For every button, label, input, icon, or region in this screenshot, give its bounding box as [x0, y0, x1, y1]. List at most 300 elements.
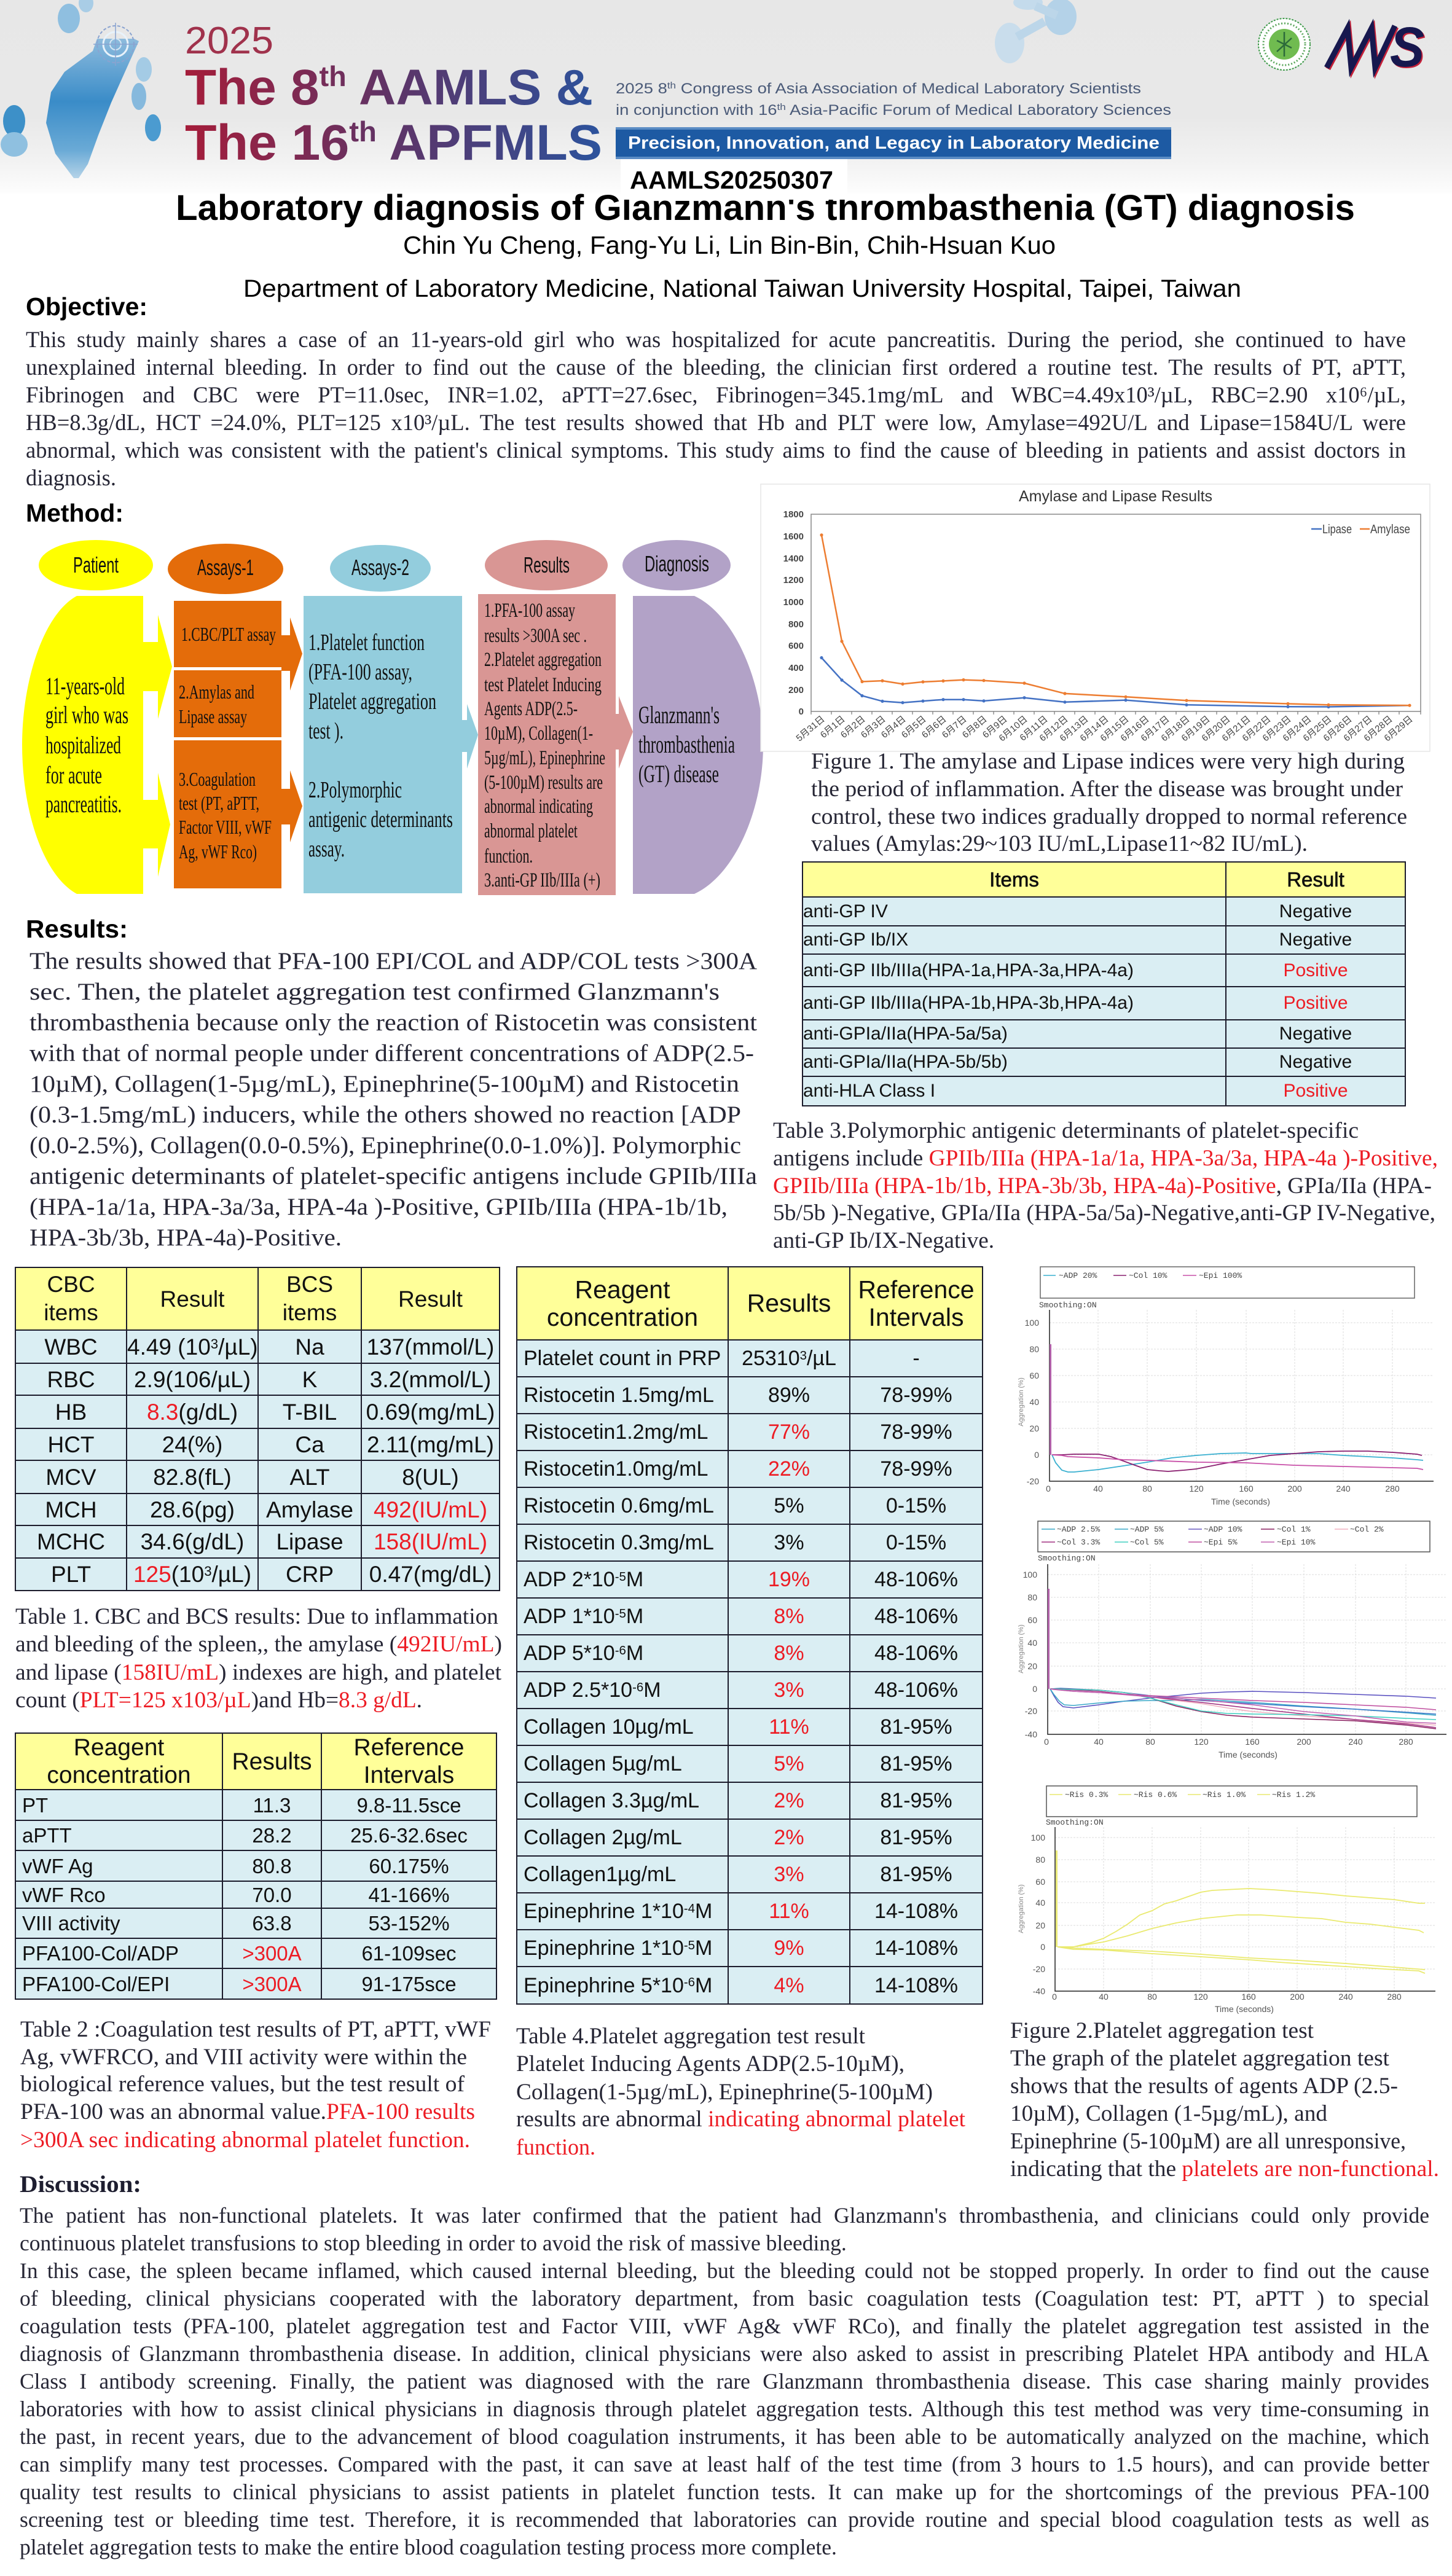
aggregation chart A: ADP 20%, Col 10%, Epi 100%: 60	[1029, 1371, 1039, 1380]
flow column: Patient	[22, 540, 172, 894]
objective paragraph: abnormal, which was consistent with the patient's clinical symptoms. This study aims to find the cause of bleeding in patients and assist doctors in	[26, 437, 1406, 463]
table 2 header row: VIII activity	[22, 1912, 120, 1935]
table 4 caption: Table 4.Platelet aggregation test result	[516, 2024, 866, 2049]
table 4 caption: function.	[516, 2135, 595, 2160]
table 4 header row: 78-99%	[880, 1457, 952, 1481]
table 4 header row	[517, 1267, 982, 2003]
aggregation chart C: Ristocetin series: 0	[1040, 1942, 1045, 1952]
table 1 caption: count (PLT=125 x103/µL)and Hb=8.3 g/dL.	[15, 1688, 422, 1713]
chart x-axis date labels: 6月14日	[1078, 714, 1111, 743]
flow column: Assays-1: Ag, vWF Rco)	[179, 840, 257, 863]
table 4 header row: Collagen 5µg/mL	[524, 1752, 682, 1775]
aggregation chart C: Ristocetin series: Smoothing:ON	[1046, 1818, 1104, 1827]
chart x-axis date labels: 6月23日	[1260, 714, 1293, 743]
table 4 header row: 3%	[774, 1863, 804, 1886]
chart y-axis labels: 1400	[783, 554, 804, 564]
icon: association logo: S	[1390, 16, 1424, 79]
table 4 header row: 14-108%	[874, 1936, 958, 1960]
table 4 header row: 48-106%	[874, 1678, 958, 1702]
chart legend	[1311, 523, 1410, 536]
chart x-axis date labels: 6月10日	[997, 714, 1030, 743]
discussion paragraph: continuous platelet transfusions to stop bleeding in order to avoid the risk of massive bleeding.	[20, 2231, 847, 2255]
aggregation chart B: ADP, Col and Epi dose series: 80	[1027, 1592, 1037, 1602]
table 4 header row: 14-108%	[874, 1900, 958, 1923]
chart x-axis date labels: 6月9日	[981, 714, 1010, 740]
table 1 header row: 2.11(mg/mL)	[367, 1431, 494, 1457]
legend B: ~Epi 5%	[1204, 1538, 1238, 1547]
table 1 header row: 4.49 (103/µL)	[127, 1334, 258, 1359]
chart x-axis date labels: 6月17日	[1139, 714, 1172, 743]
table 3 header row	[803, 863, 1405, 1105]
abstract number	[621, 159, 847, 200]
aggregation chart A: ADP 20%, Col 10%, Epi 100%: 240	[1336, 1484, 1351, 1494]
discussion paragraph: Class I antibody screening. Finally, the patient was diagnosed with the rare Glanzmann thrombasthenia disease. This case sharing mainly provides	[20, 2369, 1429, 2394]
aggregation chart B: ADP, Col and Epi dose series: -20	[1025, 1706, 1037, 1716]
chart x-axis date labels: 6月7日	[940, 714, 969, 740]
aggregation chart A: ADP 20%, Col 10%, Epi 100%: 40	[1029, 1397, 1039, 1407]
table 4 header row: 81-95%	[880, 1826, 952, 1849]
chart x-axis date labels: 6月4日	[879, 714, 908, 740]
chart legend: Amylase	[1370, 523, 1410, 536]
chart x-axis date labels: 6月20日	[1199, 714, 1233, 743]
table 2 header row: 28.2	[252, 1824, 292, 1847]
aggregation chart A: ADP 20%, Col 10%, Epi 100%: 0	[1046, 1484, 1051, 1494]
discussion paragraph: diagnosis of Glanzmann thrombasthenia disease. In addition, clinical physicians were also asked to assist in prescribing Platelet HPA antibody and HLA	[20, 2341, 1429, 2366]
aggregation chart A: ADP 20%, Col 10%, Epi 100%: 160	[1239, 1484, 1254, 1494]
aggregation chart C: Ristocetin series: 80	[1035, 1855, 1045, 1865]
legend C	[1046, 1786, 1417, 1817]
flow column: Results: results >300A sec .	[484, 625, 587, 647]
table 1 header row: Result	[160, 1286, 224, 1311]
table 1 header row: items	[44, 1300, 98, 1325]
legend B	[1038, 1521, 1430, 1552]
aggregation chart C: Ristocetin series: 240	[1338, 1992, 1353, 2002]
table 4 header row: 3%	[774, 1531, 804, 1554]
discussion paragraph: the past, in recent years, due to the advancement of blood coagulation instruments, it has been able to be automatically analyzed on the machine, which	[20, 2424, 1429, 2449]
aggregation chart C: Ristocetin series: 200	[1290, 1992, 1305, 2002]
flow column: Assays-1: 2.Amylas and	[179, 681, 254, 703]
table 1 header row: HB	[55, 1400, 87, 1424]
table 4 header row: Epinephrine 1*10-4M	[524, 1900, 712, 1923]
table 1 header row: K	[302, 1366, 317, 1392]
heading: The 8th AAMLS &: th	[319, 60, 347, 92]
congress subtitle: th	[777, 102, 786, 112]
table 4 header row: 3%	[774, 1678, 804, 1702]
aggregation chart B: ADP, Col and Epi dose series: 200	[1297, 1737, 1311, 1747]
figure 2 caption: indicating that the platelets are non-functional.	[1010, 2156, 1439, 2182]
table 4 header row: Collagen1µg/mL	[524, 1863, 676, 1886]
flow column: Diagnosis: thrombasthenia	[638, 730, 735, 758]
table 4 header row: 78-99%	[880, 1420, 952, 1444]
congress subtitle: in conjunction with 16	[616, 102, 756, 119]
table 1 header row: 82.8(fL)	[153, 1465, 232, 1489]
aggregation chart C: Ristocetin series: 80	[1147, 1992, 1157, 2002]
table 4 caption	[516, 2024, 966, 2160]
figure 2 caption: 10µM), Collagen (1-5µg/mL), and	[1010, 2101, 1327, 2126]
table 1 caption	[15, 1604, 502, 1713]
table 4 header row: 81-95%	[880, 1863, 952, 1886]
table 2 header row: 60.175%	[369, 1854, 449, 1877]
legend B: ~Col 3.3%	[1057, 1538, 1100, 1547]
heading: The 8th AAMLS &: AAMLS &	[347, 60, 593, 115]
table 4 header row: 9%	[774, 1936, 804, 1960]
table 4 header row: 81-95%	[880, 1789, 952, 1812]
flow column: Results: (5-100µM) results are	[484, 772, 603, 794]
table 2 header row: 70.0	[252, 1884, 292, 1906]
table 1 header row: ALT	[289, 1465, 330, 1489]
table 4 header row: 48-106%	[874, 1605, 958, 1628]
heading: Method: Method:	[26, 499, 124, 527]
chart y-axis labels: 1600	[783, 531, 804, 542]
figure 2 caption: shows that the results of agents ADP (2.5-	[1010, 2073, 1398, 2099]
aggregation chart A: ADP 20%, Col 10%, Epi 100%: 200	[1287, 1484, 1302, 1494]
congress subtitle: th	[667, 80, 676, 91]
chart x-axis date labels: 6月25日	[1301, 714, 1334, 743]
chart y-axis labels: 600	[788, 641, 804, 651]
chart x-axis date labels	[794, 714, 1415, 743]
aggregation chart C: Ristocetin series: 0	[1052, 1992, 1057, 2002]
flow column: Diagnosis: Glanzmann's	[638, 701, 720, 729]
table 4 header row: ADP 5*10-6M	[524, 1642, 643, 1665]
aggregation chart A: ADP 20%, Col 10%, Epi 100%: 120	[1189, 1484, 1204, 1494]
figure 2 caption: The graph of the platelet aggregation test	[1010, 2046, 1390, 2071]
legend C: ~Ris 0.6%	[1134, 1790, 1177, 1799]
flow column: Results: Results	[524, 552, 570, 577]
table 4 header row: ADP 2.5*10-6M	[524, 1678, 661, 1702]
figure 1 caption: the period of inflammation. After the disease was brought under	[811, 777, 1403, 802]
table 2 header row: Intervals	[364, 1762, 454, 1788]
objective paragraph	[26, 327, 1406, 490]
table 2 header row: 9.8-11.5sce	[356, 1794, 461, 1816]
table 1 header row: CBC	[47, 1272, 95, 1297]
flow column: Results: Agents ADP(2.5-	[484, 698, 578, 720]
table 4 header row: Collagen 3.3µg/mL	[524, 1789, 699, 1812]
chart x-axis date labels: 5月31日	[794, 714, 827, 743]
table 3 header row: Negative	[1279, 1052, 1352, 1072]
table 4 caption: Collagen(1-5µg/mL), Epinephrine(5-100µM)	[516, 2080, 933, 2105]
discussion paragraph	[20, 2203, 1429, 2559]
flow column: Assays-2	[304, 545, 478, 893]
table 2 caption: Ag, vWFRCO, and VIII activity were within the	[20, 2045, 467, 2070]
chart y-axis labels: 1800	[783, 509, 804, 520]
table 3 header row: Positive	[1283, 960, 1348, 981]
flow column: Diagnosis: (GT) disease	[638, 760, 719, 788]
table 1 caption: and lipase (158IU/mL) indexes are high, and platelet	[15, 1660, 502, 1685]
table 4 header row: Ristocetin1.0mg/mL	[524, 1457, 708, 1481]
flow column: Assays-2: test ).	[308, 718, 343, 744]
table 1 header row: 137(mmol/L)	[367, 1334, 494, 1359]
table 3 header row: Positive	[1283, 1081, 1348, 1101]
table 1 header row: RBC	[47, 1366, 95, 1392]
series: amylase	[820, 533, 1411, 707]
chart x-axis date labels: 6月15日	[1098, 714, 1131, 743]
flow column: Results: abnormal platelet	[484, 820, 578, 842]
table 4 header row: 0-15%	[886, 1494, 946, 1517]
table 3 caption: 5b/5b )-Negative, GPIa/IIa (HPA-5a/5a)-Negative,anti-GP IV-Negative,	[773, 1200, 1435, 1226]
table 1 header row: 158(IU/mL)	[374, 1529, 487, 1554]
table 2 header row: PT	[22, 1794, 48, 1816]
aggregation chart C: Ristocetin series: Time (seconds)	[1215, 2004, 1274, 2014]
discussion paragraph: The patient has non-functional platelets. It was later confirmed that the patient had Glanzmann's thrombasthenia, and clinicians could only provide	[20, 2203, 1429, 2228]
chart x-axis date labels: 6月26日	[1321, 714, 1354, 743]
chart x-axis date labels: 6月18日	[1159, 714, 1192, 743]
table 4 header row: 11%	[769, 1715, 809, 1739]
aggregation chart B: ADP, Col and Epi dose series: Aggregation (%)	[1018, 1624, 1025, 1674]
table 3 caption	[773, 1118, 1438, 1253]
flow column: Assays-1: Lipase assay	[179, 705, 247, 727]
figure 2 caption	[1010, 2018, 1439, 2182]
table 4 header row: Platelet count in PRP	[524, 1347, 721, 1370]
aggregation chart B: ADP, Col and Epi dose series	[1018, 1521, 1446, 1760]
icon: association logo	[1327, 16, 1424, 79]
aggregation chart B: ADP, Col and Epi dose series: 240	[1348, 1737, 1363, 1747]
flow column: Patient: Patient	[73, 552, 119, 577]
legend B: ~Col 5%	[1130, 1538, 1164, 1547]
method flow diagram	[22, 540, 763, 895]
table 3 header row: anti-GPIa/IIa(HPA-5a/5a)	[803, 1024, 1008, 1044]
heading: The 8th AAMLS &: The 8	[185, 60, 316, 115]
table 4 header row: Reagent	[575, 1275, 670, 1304]
table 1 header row: 125(103/µL)	[133, 1562, 251, 1587]
table 1 header row: items	[283, 1300, 337, 1325]
results text: sec. Then, the platelet aggregation test confirmed Glanzmann's	[29, 979, 720, 1005]
table 4 header row: 81-95%	[880, 1715, 952, 1739]
table 4 header row: 4%	[774, 1973, 804, 1997]
poster title: Laboratory diagnosis of Glanzmann's thrombasthenia (GT) diagnosis	[176, 188, 1355, 228]
figure 1 caption: values (Amylas:29~103 IU/mL,Lipase11~82 IU/mL).	[811, 831, 1308, 856]
legend A: ~Col 10%	[1129, 1271, 1167, 1280]
table 1 header row: T-BIL	[283, 1400, 337, 1424]
flow column: Patient: girl who was	[45, 701, 128, 729]
aggregation chart A: ADP 20%, Col 10%, Epi 100%: Aggregation (%)	[1018, 1377, 1025, 1427]
aggregation chart C: Ristocetin series: 280	[1387, 1992, 1402, 2002]
chart x-axis date labels: 6月22日	[1240, 714, 1273, 743]
table 2 header row: concentration	[47, 1762, 191, 1788]
table 4 header row: 0-15%	[886, 1531, 946, 1554]
flow column: Patient: hospitalized	[45, 731, 121, 759]
table 4 header row: Ristocetin1.2mg/mL	[524, 1420, 708, 1444]
heading: Results: Results:	[26, 915, 128, 943]
flow column: Results: function.	[484, 845, 533, 867]
flow column: Assays-2: 1.Platelet function	[308, 630, 425, 656]
flow column: Results: abnormal indicating	[484, 796, 593, 818]
table 4 header row: 2%	[774, 1789, 804, 1812]
legend C: ~Ris 1.0%	[1203, 1790, 1246, 1799]
flow column: Patient: 11-years-old	[45, 672, 125, 700]
aggregation chart A: ADP 20%, Col 10%, Epi 100%: 280	[1385, 1484, 1400, 1494]
aggregation chart B: ADP, Col and Epi dose series: 60	[1027, 1615, 1037, 1625]
flow column: Patient: for acute	[45, 761, 102, 789]
chart legend: Lipase	[1322, 523, 1352, 536]
line chart: amylase and lipase results	[761, 484, 1430, 751]
slogan banner	[616, 127, 1171, 159]
table 2 header row: >300A	[242, 1942, 302, 1965]
aggregation chart B: ADP, Col and Epi dose series: 100	[1023, 1570, 1037, 1580]
table 4 header row: Ristocetin 1.5mg/mL	[524, 1384, 714, 1407]
table 2 header row: vWF Ag	[22, 1854, 93, 1877]
aggregation chart B: ADP, Col and Epi dose series: 160	[1245, 1737, 1260, 1747]
table 2 header row: PFA100-Col/EPI	[22, 1972, 170, 1995]
table 1 header row: MCHC	[37, 1529, 105, 1554]
flow column: Assays-2: assay.	[308, 836, 345, 862]
table 1 header row: Lipase	[276, 1529, 343, 1554]
aggregation chart A: ADP 20%, Col 10%, Epi 100%: -20	[1027, 1476, 1039, 1486]
table 3 header row: anti-GP IIb/IIIa(HPA-1a,HPA-3a,HPA-4a)	[803, 960, 1134, 981]
chart x-axis date labels: 6月28日	[1362, 714, 1395, 743]
chart x-axis date labels: 6月24日	[1281, 714, 1314, 743]
objective paragraph: HB=8.3g/dL, HCT =24.0%, PLT=125 x10³/µL. The test results showed that Hb and PLT were low, Amylase=492U/L and Lipase=1584U/L were	[26, 410, 1406, 435]
flow column: Assays-2: (PFA-100 assay,	[308, 659, 412, 685]
aggregation chart A: ADP 20%, Col 10%, Epi 100%: 0	[1034, 1450, 1039, 1460]
table 2 header row: 63.8	[252, 1912, 292, 1935]
aggregation chart B: ADP, Col and Epi dose series: Smoothing:ON	[1038, 1554, 1096, 1563]
aggregation chart C: Ristocetin series: 40	[1035, 1898, 1045, 1908]
table 1 header row: 28.6(pg)	[150, 1497, 235, 1522]
aggregation chart A: ADP 20%, Col 10%, Epi 100%: Smoothing:ON	[1039, 1301, 1097, 1310]
legend B: ~Epi 10%	[1277, 1538, 1316, 1547]
abstract number: AAMLS20250307	[630, 166, 833, 194]
slogan banner: Precision, Innovation, and Legacy in Laboratory Medicine	[628, 133, 1160, 153]
table 4 header row: Collagen 2µg/mL	[524, 1826, 682, 1849]
table 1 header row: 0.69(mg/mL)	[366, 1400, 495, 1424]
aggregation chart B: ADP, Col and Epi dose series: 0	[1032, 1684, 1037, 1694]
flow column: Diagnosis	[622, 540, 763, 894]
aggregation chart A: ADP 20%, Col 10%, Epi 100%: 80	[1142, 1484, 1152, 1494]
results text: 10µM), Collagen(1-5µg/mL), Epinephrine(5-100µM) and Ristocetin	[29, 1071, 739, 1097]
table 2 header row: PFA100-Col/ADP	[22, 1942, 179, 1965]
chart y-axis labels: 200	[788, 685, 804, 695]
flow column: Assays-1: 3.Coagulation	[179, 768, 256, 790]
objective paragraph: Fibrinogen and CBC were PT=11.0sec, INR=1.02, aPTT=27.6sec, Fibrinogen=345.1mg/mL and WBC=4.49x10³/µL, RBC=2.90 x10⁶/µL,	[26, 382, 1406, 407]
table 3 caption: antigens include GPIIb/IIIa (HPA-1a/1a, HPA-3a/3a, HPA-4a )-Positive,	[773, 1146, 1438, 1171]
table 2 caption: biological reference values, but the test result of	[20, 2072, 465, 2097]
icon: Taiwan island map with target reticle	[46, 23, 139, 178]
table 4 header row: 48-106%	[874, 1642, 958, 1665]
table 1 header row: WBC	[44, 1334, 98, 1359]
table 3: polymorphic antigenic determinants	[802, 861, 1406, 1106]
table 3 header row: Negative	[1279, 930, 1352, 950]
discussion paragraph: In this case, the spleen became inflamed, which caused internal bleeding, but the bleeding could not be stopped properly. In order to find out the cause	[20, 2258, 1429, 2283]
table 3 header row: Positive	[1283, 993, 1348, 1013]
table 1 header row: HCT	[47, 1431, 95, 1457]
table 1 caption: Table 1. CBC and BCS results: Due to inflammation	[15, 1604, 498, 1629]
table 4 header row: ADP 1*10-5M	[524, 1605, 643, 1628]
aggregation chart B: ADP, Col and Epi dose series: 80	[1145, 1737, 1155, 1747]
table 1 header row: 3.2(mmol/L)	[370, 1366, 491, 1392]
discussion paragraph: can simplify many test processes. Compared with the past, it can save at least half of the test time (from 3 hours to 1.5 hours), and can provide better	[20, 2452, 1429, 2476]
icon: green society seal	[1258, 18, 1310, 70]
aggregation chart B: ADP, Col and Epi dose series: 120	[1194, 1737, 1209, 1747]
discussion paragraph: of bleeding, clinical physicians cooperated with the laboratory department, from basic coagulation tests (Coagulation test: PT, aPTT ) to special	[20, 2286, 1429, 2311]
table 1 header row: Amylase	[266, 1497, 353, 1522]
table 2 header row: 91-175sce	[361, 1972, 457, 1995]
aggregation chart A: ADP 20%, Col 10%, Epi 100%: Time (seconds)	[1211, 1497, 1270, 1506]
legend B: ~Col 1%	[1277, 1525, 1311, 1534]
chart x-axis date labels: 6月8日	[960, 714, 989, 740]
table 2 header row	[16, 1734, 496, 1999]
table 2 header row: 11.3	[253, 1794, 291, 1816]
table 2 header row: aPTT	[22, 1824, 72, 1847]
table 3 header row: anti-GP IIb/IIIa(HPA-1b,HPA-3b,HPA-4a)	[803, 993, 1134, 1013]
legend B: ~ADP 10%	[1204, 1525, 1242, 1534]
objective paragraph: diagnosis.	[26, 465, 116, 490]
table 4 header row: 11%	[769, 1900, 809, 1923]
table 2 header row: 80.8	[252, 1854, 292, 1877]
heading: Discussion: Discussion:	[20, 2171, 141, 2198]
flow column: Results: 10µM), Collagen(1-	[484, 722, 593, 745]
flow column: Assays-1: Assays-1	[197, 555, 254, 580]
conference banner background	[0, 0, 1452, 194]
chart x-axis date labels: 6月5日	[900, 714, 928, 740]
aggregation chart C: Ristocetin series: 120	[1193, 1992, 1208, 2002]
chart x-axis date labels: 6月1日	[818, 714, 847, 740]
table 1 header row	[16, 1268, 499, 1590]
table 1 header row: Result	[398, 1286, 463, 1311]
table 2 caption: >300A sec indicating abnormal platelet function.	[20, 2128, 470, 2153]
chart y-axis labels: 1000	[783, 597, 804, 608]
chart y-axis labels: 0	[799, 707, 804, 717]
flow column: Results	[478, 540, 633, 895]
table 2 header row: 41-166%	[368, 1884, 450, 1906]
aggregation chart C: Ristocetin series: Aggregation (%)	[1018, 1884, 1025, 1933]
aggregation chart B: ADP, Col and Epi dose series: 280	[1399, 1737, 1413, 1747]
aggregation chart B: ADP, Col and Epi dose series: 40	[1094, 1737, 1104, 1747]
flow column: Results: 2.Platelet aggregation	[484, 649, 602, 671]
figure 2 caption: Figure 2.Platelet aggregation test	[1010, 2018, 1314, 2043]
table 4 header row: 78-99%	[880, 1384, 952, 1407]
table 4: platelet aggregation test results	[516, 1266, 983, 2005]
flow column: Patient: pancreatitis.	[45, 790, 122, 818]
chart x-axis date labels: 6月3日	[859, 714, 888, 740]
congress subtitle	[616, 80, 1171, 119]
heading: The 16th APFMLS: APFMLS	[377, 115, 602, 171]
table 4 header row: 2%	[774, 1826, 804, 1849]
results text: with that of normal people under different concentrations of ADP(2.5-	[29, 1040, 754, 1067]
legend B: ~ADP 5%	[1130, 1525, 1164, 1534]
heading: Objective: Objective:	[26, 292, 147, 321]
legend A: ~Epi 100%	[1199, 1271, 1242, 1280]
aggregation chart C: Ristocetin series: 60	[1035, 1877, 1045, 1887]
table 3 caption: GPIIb/IIIa (HPA-1b/1b, HPA-3b/3b, HPA-4a)-Positive , GPIa/IIa (HPA-	[773, 1173, 1432, 1199]
aggregation chart A: ADP 20%, Col 10%, Epi 100%: 20	[1029, 1423, 1039, 1433]
aggregation chart C: Ristocetin series: 20	[1035, 1920, 1045, 1930]
flow column: Assays-2: Platelet aggregation	[308, 689, 436, 714]
aggregation chart C: Ristocetin series: -40	[1033, 1986, 1045, 1996]
aggregation chart A: ADP 20%, Col 10%, Epi 100%: 80	[1029, 1344, 1039, 1354]
table 1 header row: 24(%)	[162, 1431, 222, 1457]
chart x-axis date labels: 6月13日	[1058, 714, 1091, 743]
legend A	[1040, 1267, 1415, 1298]
table 2 header row: 53-152%	[368, 1912, 450, 1935]
legend B: ~Col 2%	[1350, 1525, 1384, 1534]
table 2 header row: Reference	[354, 1734, 464, 1761]
flow column: Assays-1: test (PT, aPTT,	[179, 792, 259, 814]
chart y-axis labels: 800	[788, 619, 804, 630]
table 4 header row: 14-108%	[874, 1973, 958, 1997]
table 1 header row: CRP	[286, 1562, 334, 1587]
legend A: ~ADP 20%	[1059, 1271, 1097, 1280]
table 4 header row: Epinephrine 1*10-5M	[524, 1936, 712, 1960]
results text: thrombasthenia because only the reaction of Ristocetin was consistent	[29, 1009, 757, 1036]
table 4 header row: 8%	[774, 1605, 804, 1628]
aggregation chart A: ADP 20%, Col 10%, Epi 100%: 100	[1025, 1318, 1039, 1328]
table 3 header row: Result	[1287, 868, 1344, 891]
table 1 header row: PLT	[51, 1562, 91, 1587]
discussion paragraph: coagulation tests (PFA-100, platelet aggregation test and Factor VIII, vWF Ag& vWF RCo), and finally the platelet aggregation test assisted in the	[20, 2314, 1429, 2338]
congress subtitle: 2025 8	[616, 80, 661, 97]
table 4 header row: 5%	[774, 1752, 804, 1775]
table 4 header row: 22%	[768, 1457, 810, 1481]
